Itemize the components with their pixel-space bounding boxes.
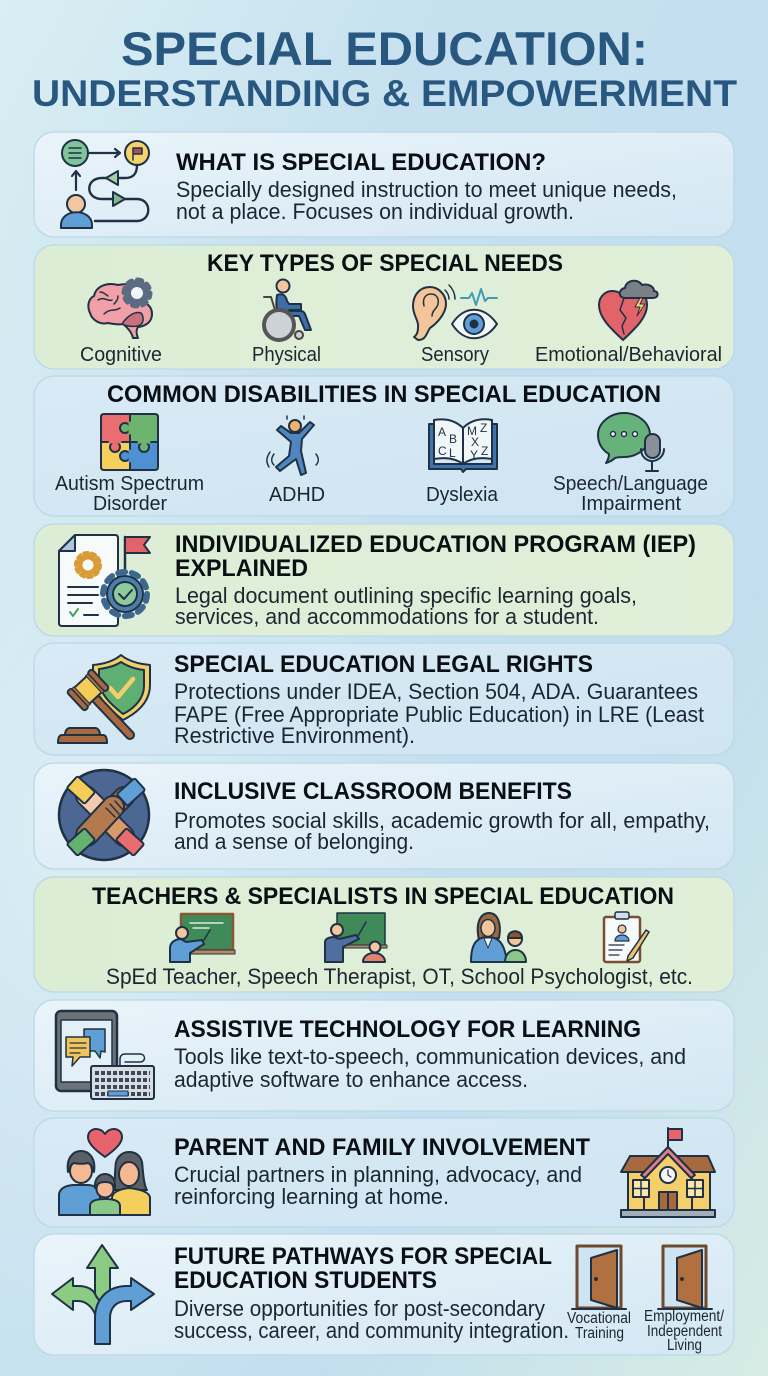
text block: Protections under IDEA, Section 504, ADA. Guarantees <box>174 679 698 704</box>
icon: open book: B <box>449 432 457 446</box>
heading: EXPLAINED <box>175 555 308 582</box>
labels: Sensory <box>421 343 490 366</box>
heading: INCLUSIVE CLASSROOM BENEFITS <box>174 778 572 805</box>
text block: services, and accommodations for a student. <box>175 604 599 629</box>
heading: WHAT IS SPECIAL EDUCATION? <box>176 149 546 176</box>
labels: Cognitive <box>80 343 162 366</box>
label <box>644 1308 725 1354</box>
labels: Disorder <box>93 492 167 515</box>
icon: tablet and keyboard <box>56 1011 154 1099</box>
panel: future pathways <box>34 1234 734 1355</box>
text block: Diverse opportunities for post-secondary <box>174 1296 546 1321</box>
icon: branching arrows <box>52 1245 154 1344</box>
icon: open book <box>429 419 497 472</box>
heading <box>175 531 696 582</box>
icon: open book: A <box>438 425 446 439</box>
text block: Specially designed instruction to meet unique needs, <box>176 177 677 202</box>
heading <box>174 1243 552 1294</box>
panel: parent and family <box>34 1118 734 1227</box>
text block: Crucial partners in planning, advocacy, and <box>174 1162 582 1187</box>
icon: school building <box>621 1128 715 1217</box>
text block: Promotes social skills, academic growth for all, empathy, <box>174 808 710 833</box>
icon: ear, eye and sound wave <box>413 285 497 340</box>
labels: Impairment <box>581 492 681 515</box>
heading: TEACHERS & SPECIALISTS IN SPECIAL EDUCATION <box>92 883 674 910</box>
title <box>32 22 737 114</box>
icon: therapist with student <box>325 913 387 962</box>
text block: Restrictive Environment). <box>174 723 415 748</box>
text block: SpEd Teacher, Speech Therapist, OT, School Psychologist, etc. <box>106 964 693 989</box>
icon: broken heart and storm cloud <box>599 281 658 340</box>
label: Vocational <box>567 1310 631 1327</box>
icon: open book: Z <box>480 421 487 435</box>
label: Training <box>575 1325 624 1342</box>
labels: ADHD <box>269 483 325 506</box>
text block <box>174 808 710 854</box>
icon: open book: Z <box>481 444 488 458</box>
icon: wheelchair user <box>264 280 311 340</box>
icon: open book: X <box>471 435 479 449</box>
panel: legal rights <box>34 643 734 755</box>
icon: gavel and shield <box>58 655 150 743</box>
icon: teacher at chalkboard <box>170 914 235 962</box>
panel: common disabilities <box>34 376 734 516</box>
icon: puzzle <box>101 414 158 470</box>
labels <box>55 472 708 515</box>
panel: inclusive classroom <box>34 763 734 869</box>
icon: clipboard <box>604 912 649 962</box>
text block <box>176 177 677 224</box>
panel: IEP explained <box>34 524 734 636</box>
heading: ASSISTIVE TECHNOLOGY FOR LEARNING <box>174 1016 641 1043</box>
label: Living <box>667 1337 702 1354</box>
heading: SPECIAL EDUCATION LEGAL RIGHTS <box>174 651 593 678</box>
icon: specialist with child <box>471 913 526 962</box>
icon: speech bubble and microphone <box>598 413 664 471</box>
text block: not a place. Focuses on individual growth. <box>176 199 574 224</box>
text block <box>174 1044 686 1092</box>
icon: stacked hands <box>59 770 149 860</box>
text block: Tools like text-to-speech, communication devices, and <box>174 1044 686 1069</box>
label: Employment/ <box>644 1308 725 1325</box>
icon: roadmap <box>61 140 149 228</box>
icon: door one <box>572 1246 626 1309</box>
icon: IEP document with gear and flag <box>59 535 150 626</box>
labels: Emotional/Behavioral <box>535 343 722 366</box>
text block <box>174 679 705 748</box>
text block: FAPE (Free Appropriate Public Education) in LRE (Least <box>174 702 705 727</box>
text block: Legal document outlining specific learning goals, <box>175 583 637 608</box>
text block: adaptive software to enhance access. <box>174 1067 528 1092</box>
heading: INDIVIDUALIZED EDUCATION PROGRAM (IEP) <box>175 531 696 558</box>
icon: door two <box>658 1246 712 1309</box>
panel: what is special education <box>34 132 734 237</box>
heading: EDUCATION STUDENTS <box>174 1267 437 1294</box>
labels: Speech/Language <box>553 472 708 495</box>
labels: Autism Spectrum <box>55 472 204 495</box>
panel: key types of special needs <box>34 245 734 369</box>
title: UNDERSTANDING & EMPOWERMENT <box>32 73 737 114</box>
text block: reinforcing learning at home. <box>174 1184 449 1209</box>
panel: assistive technology <box>34 1000 734 1111</box>
label: Independent <box>647 1323 723 1340</box>
labels: Dyslexia <box>426 483 499 506</box>
icon: brain with gear <box>88 280 152 338</box>
icon: open book: M <box>467 424 477 438</box>
labels <box>80 343 722 366</box>
heading: KEY TYPES OF SPECIAL NEEDS <box>207 250 563 277</box>
icon: adhd figure <box>267 416 318 475</box>
text block: success, career, and community integration. <box>174 1318 569 1343</box>
text block: and a sense of belonging. <box>174 829 414 854</box>
heading: COMMON DISABILITIES IN SPECIAL EDUCATION <box>107 381 661 408</box>
text block <box>174 1162 582 1209</box>
icon: open book: C <box>438 444 447 458</box>
text block <box>174 1296 569 1343</box>
icon: open book: L <box>449 446 456 460</box>
text block <box>175 583 637 629</box>
heading: FUTURE PATHWAYS FOR SPECIAL <box>174 1243 552 1270</box>
label <box>567 1310 631 1342</box>
title: SPECIAL EDUCATION: <box>121 22 648 75</box>
heading: PARENT AND FAMILY INVOLVEMENT <box>174 1134 590 1161</box>
panel: teachers and specialists <box>34 877 734 992</box>
labels: Physical <box>252 343 321 366</box>
icon: family with heart <box>59 1129 150 1215</box>
icon: open book: Y <box>470 448 478 462</box>
